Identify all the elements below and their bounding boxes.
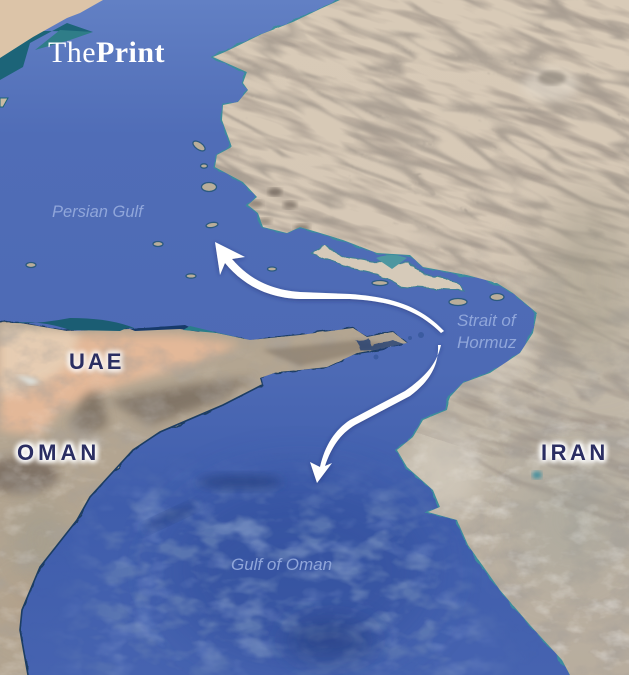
country label: OMAN: OMAN [17,440,100,465]
country label: OMAN: OMAN [17,440,100,465]
country label: IRAN: IRAN [541,440,609,465]
island: Qeshm [312,246,465,291]
land: northern coast top left [0,0,103,107]
country label: IRAN: IRAN [541,440,609,465]
sea label: Gulf of Oman: Gulf of Oman [231,555,332,574]
arrow to Gulf of Oman [310,345,441,483]
seabed shading: Gulf of Oman [70,470,492,675]
country label: UAE: UAE [69,349,124,374]
land: UAE and Oman [0,318,420,675]
small islands [26,139,504,306]
shoals off the peninsula tip [374,332,424,360]
dark Oman coastline [20,385,262,675]
sea label: Strait of Hormuz: Hormuz [457,333,517,352]
land: Iran [210,0,629,675]
logo: ThePrint: ThePrint [48,36,165,69]
arrow to Persian Gulf [215,242,444,333]
sea label: Strait of Hormuz: Strait of [457,311,518,330]
sea label: Persian Gulf: Persian Gulf [52,203,145,221]
country label: UAE: UAE [69,349,124,374]
